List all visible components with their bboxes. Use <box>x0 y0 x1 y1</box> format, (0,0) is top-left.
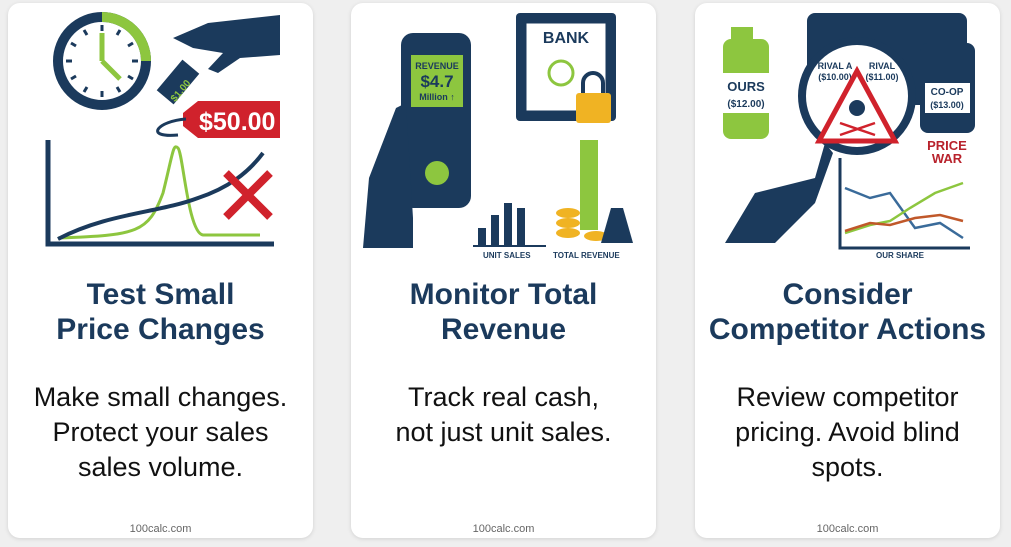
icon: clock, price tags and chart: $50.00 <box>199 108 275 136</box>
text block <box>34 382 287 482</box>
icon: bottles, magnifier and chart: ($11.00) <box>865 72 899 82</box>
icon: bottles, magnifier and chart: PRICE <box>927 138 967 153</box>
panel: consider competitor actions <box>695 3 1000 538</box>
text block <box>735 382 960 482</box>
text block <box>395 382 612 447</box>
icon: phone, bank safe, revenue bars: UNIT SALES <box>483 251 531 260</box>
title: Price Changes <box>56 313 265 346</box>
text block: Track real cash, <box>408 382 599 412</box>
icon: phone, bank safe, revenue bars <box>363 13 633 260</box>
footer: 100calc.com <box>130 523 191 535</box>
icon: phone, bank safe, revenue bars: $4.7 <box>420 72 454 91</box>
title: Competitor Actions <box>709 313 986 346</box>
title: Revenue <box>441 313 566 346</box>
icon: phone, bank safe, revenue bars: TOTAL REVENUE <box>553 251 620 260</box>
icon: bottles, magnifier and chart: OUR SHARE <box>876 251 925 260</box>
icon: phone, bank safe, revenue bars: REVENUE <box>415 61 459 71</box>
panel: test small price changes <box>8 3 313 538</box>
icon: bottles, magnifier and chart: CO-OP <box>931 87 964 98</box>
title: Monitor Total <box>410 278 597 311</box>
text block: spots. <box>811 452 884 482</box>
icon: bottles, magnifier and chart: RIVAL A <box>818 61 853 71</box>
icon: bottles, magnifier and chart: RIVAL <box>869 61 896 71</box>
footer: 100calc.com <box>817 523 878 535</box>
panel: monitor total revenue <box>351 3 656 538</box>
icon: phone, bank safe, revenue bars: BANK <box>543 30 590 47</box>
icon: bottles, magnifier and chart: WAR <box>932 151 963 166</box>
text block: not just unit sales. <box>395 417 612 447</box>
text block: sales volume. <box>78 452 243 482</box>
icon: bottles, magnifier and chart: OURS <box>727 79 765 94</box>
title <box>709 278 986 346</box>
title: Consider <box>782 278 913 311</box>
icon: bottles, magnifier and chart: ($12.00) <box>727 99 765 110</box>
icon: phone, bank safe, revenue bars: Million ↑ <box>419 92 455 102</box>
icon: bottles, magnifier and chart: ($13.00) <box>930 100 964 110</box>
icon: clock, price tags and chart <box>46 12 280 246</box>
icon: bottles, magnifier and chart <box>723 13 975 260</box>
icon: bottles, magnifier and chart: ($10.00) <box>818 72 852 82</box>
footer: 100calc.com <box>473 523 534 535</box>
text block: Protect your sales <box>52 417 269 447</box>
title <box>410 278 597 346</box>
text block: pricing. Avoid blind <box>735 417 960 447</box>
icon: clock, price tags and chart: $1.00 <box>169 78 194 104</box>
title <box>56 278 265 346</box>
text block: Review competitor <box>736 382 959 412</box>
title: Test Small <box>87 278 234 311</box>
text block: Make small changes. <box>34 382 287 412</box>
